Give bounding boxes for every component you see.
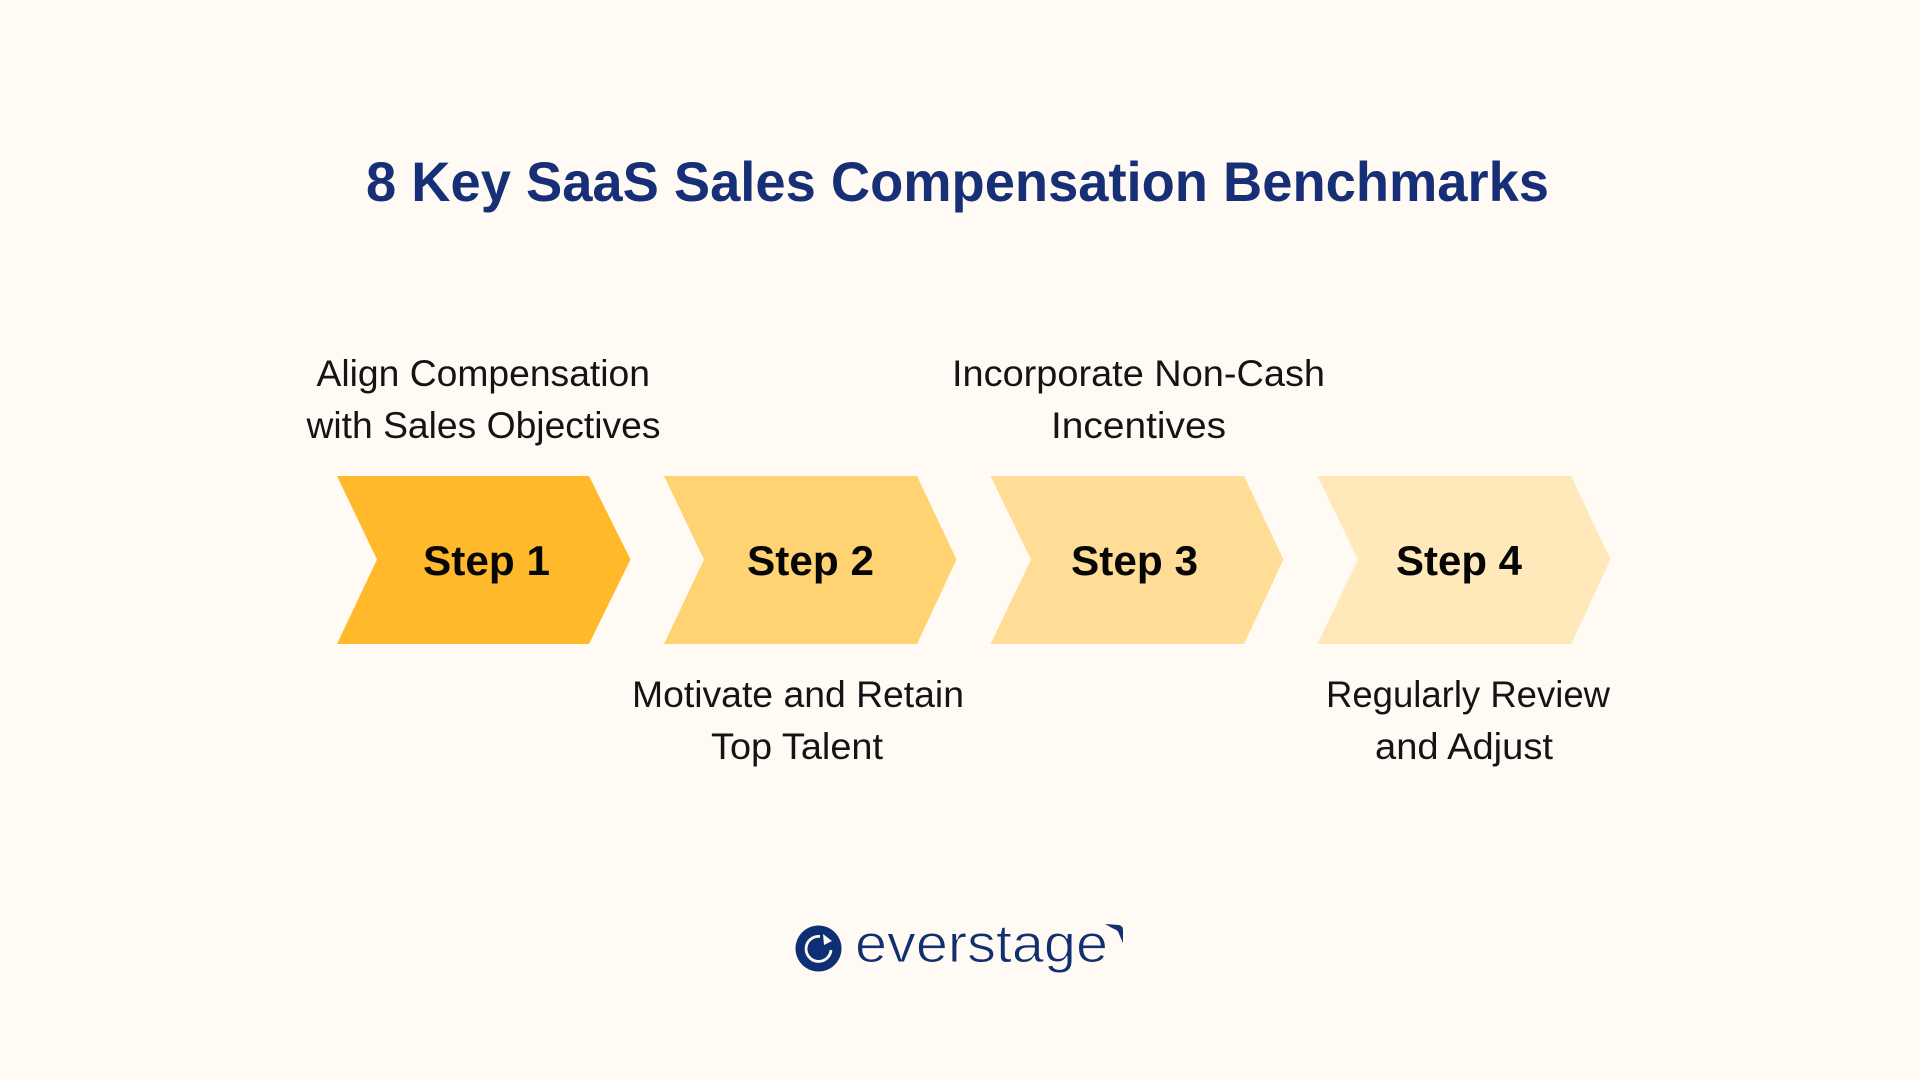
chevron: step 1: Step 1 [423,537,550,584]
text: step 3 description [952,353,1325,446]
chevron: step 3: Step 3 [1071,537,1198,584]
text: step 1 description: with Sales Objectives [305,405,660,446]
text: step 3 description: Incorporate Non-Cash [952,353,1325,394]
text: step 2 description: Top Talent [711,726,884,767]
text: step 4 description [1326,674,1610,767]
chevron: step 3 [990,476,1284,644]
chevron: step 2 [664,476,956,644]
logo: everstage [796,914,1123,974]
wordmark: everstage [855,914,1108,974]
text: step 1 description [305,353,660,446]
chevron: step 1 [337,476,630,644]
text: step 4 description: Regularly Review [1326,674,1610,715]
text: step 3 description: Incentives [1051,405,1226,446]
text: step 1 description: Align Compensation [316,353,650,394]
chevron: step 2: Step 2 [747,537,874,584]
text: step 4 description: and Adjust [1375,726,1554,767]
title: 8 Key SaaS Sales Compensation Benchmarks [366,150,1549,213]
chevron: step 4 [1318,476,1610,644]
icon: logo circle [796,926,842,972]
text: step 2 description [632,674,964,767]
icon: corner mark [1105,924,1123,943]
chevron: step 4: Step 4 [1396,537,1523,584]
text: step 2 description: Motivate and Retain [632,674,964,715]
